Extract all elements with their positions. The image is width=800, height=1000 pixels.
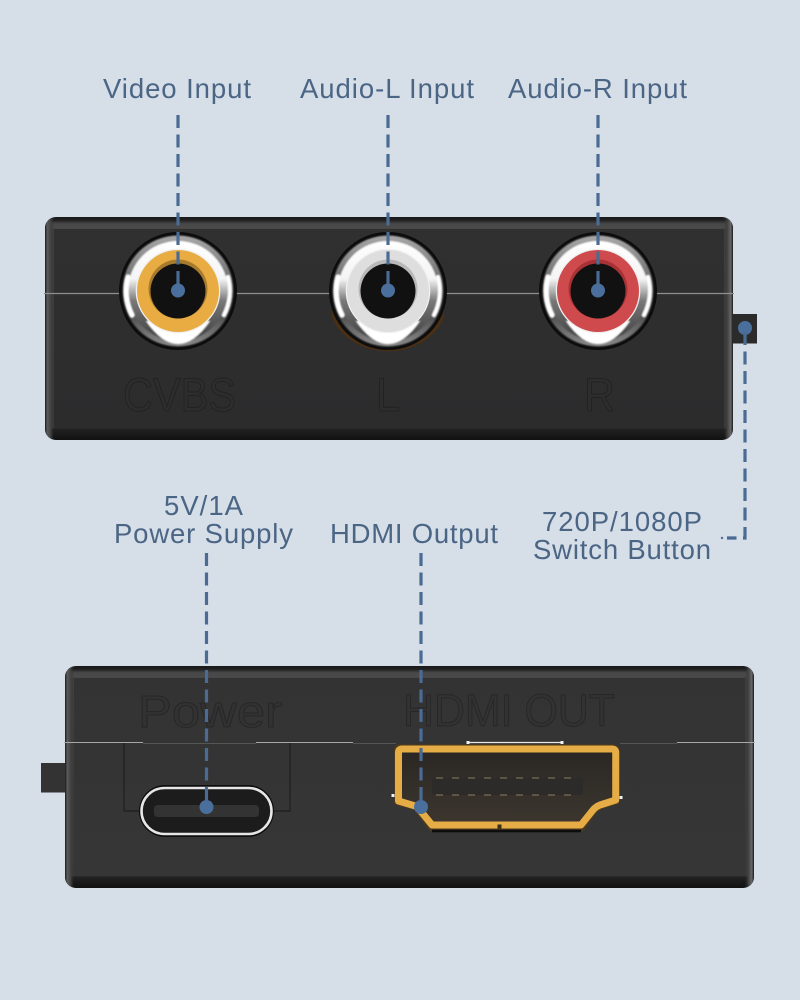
label: 720P/1080P Switch Button: Switch Button [533,534,711,565]
bottom device: output panel [41,666,755,888]
label: Audio-R Input: Audio-R Input [508,73,687,104]
port: HDMI output [392,741,622,831]
top device body [45,217,733,440]
label: 720P/1080P Switch Button: 720P/1080P [542,506,702,537]
top device: RCA input panel [44,217,757,440]
seam line [64,742,755,744]
callout: audio L leader [381,115,395,298]
seam line [44,292,734,294]
port: L white RCA jack [329,232,447,351]
recess outline around USB-C [124,743,290,811]
HDMI tongue [432,778,583,795]
callout: video input leader [171,115,185,298]
label: 5V/1A Power Supply: Power Supply [114,518,293,549]
port: CVBS yellow RCA jack [119,232,237,350]
callout: power supply leader [200,553,214,814]
bottom device body [65,666,754,888]
port: R red RCA jack [539,232,657,350]
callout: audio R leader [591,115,605,298]
label: 5V/1A Power Supply [114,490,293,549]
switch button tab, rear side [41,763,67,792]
switch button tab [731,314,757,344]
embossed label: R: R [584,368,615,421]
embossed label: Power: Power [138,686,282,737]
embossed label: HDMI OUT: HDMI OUT [403,685,615,736]
embossed label: L: L [376,368,400,421]
label: 5V/1A Power Supply: 5V/1A [164,490,244,521]
label: Video Input: Video Input [103,73,251,104]
label: HDMI Output: HDMI Output [330,518,498,549]
embossed label: CVBS: CVBS [123,368,236,421]
label: 720P/1080P Switch Button [533,506,711,565]
label: Audio-L Input: Audio-L Input [300,73,474,104]
callout: switch button leader [721,321,752,539]
callout: HDMI output leader [414,553,428,814]
port: USB-C power [139,785,274,837]
